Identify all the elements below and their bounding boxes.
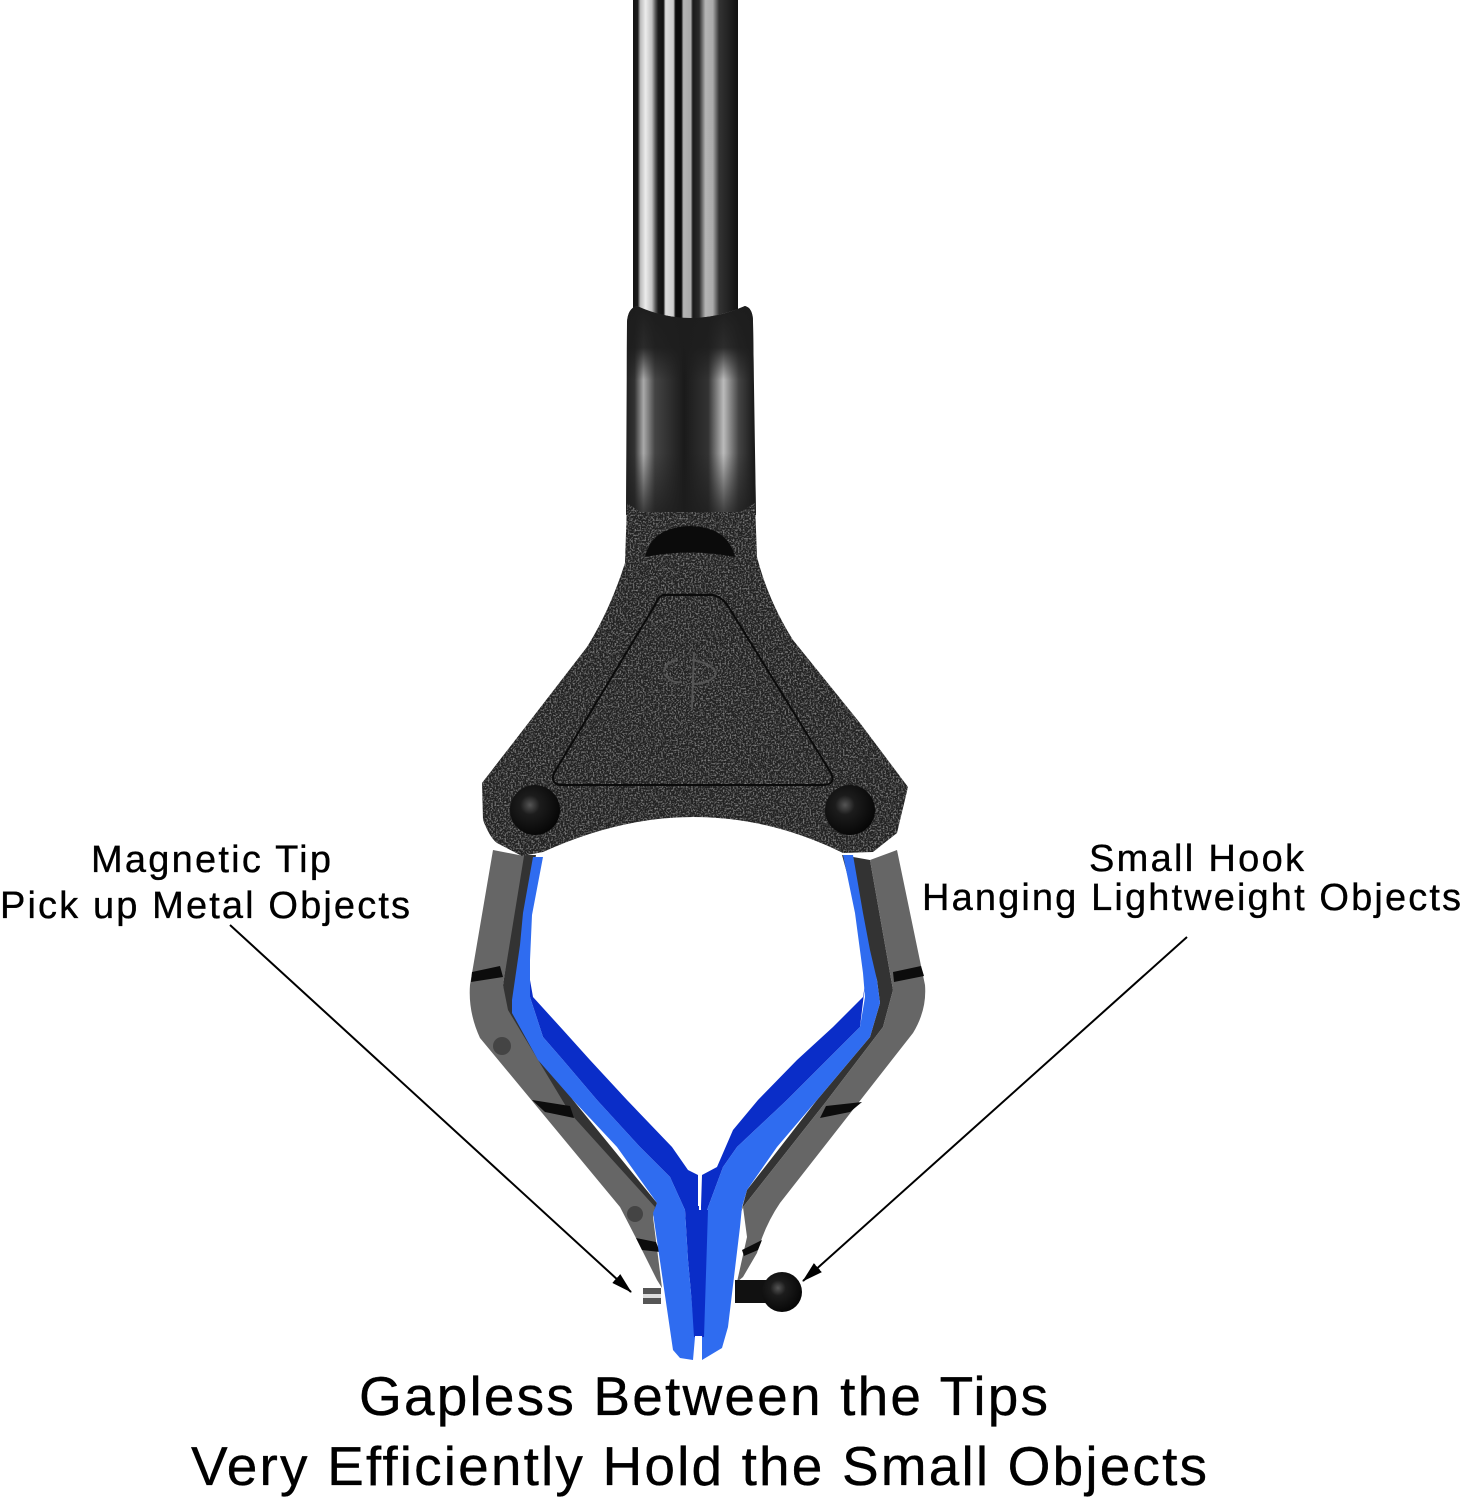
handle collar xyxy=(626,306,756,515)
black plastic handle head xyxy=(482,503,908,856)
caption: Gapless Between the Tips xyxy=(359,1365,1048,1427)
caption xyxy=(191,1365,1207,1497)
small hook xyxy=(735,1272,802,1312)
label: magnetic tip: Magnetic Tip xyxy=(91,839,331,881)
label: small hook: Hanging Lightweight Objects xyxy=(922,877,1461,919)
left gray jaw arm xyxy=(470,850,662,1288)
magnetic tip xyxy=(643,1288,661,1304)
right dark jaw liner xyxy=(741,855,893,1212)
left blue grip pad xyxy=(512,857,699,1360)
caption: Very Efficiently Hold the Small Objects xyxy=(191,1435,1207,1497)
label: small hook: Small Hook xyxy=(1089,838,1305,880)
jaw arm dark joints xyxy=(471,966,924,1256)
right rivet xyxy=(825,785,875,835)
telescopic metal shaft xyxy=(633,0,738,326)
arrow: magnetic tip xyxy=(230,925,631,1292)
triangle panel xyxy=(553,595,832,785)
arrow: small hook xyxy=(803,937,1187,1281)
left dark jaw liner xyxy=(503,855,657,1218)
label: small hook xyxy=(922,838,1461,919)
tip gap xyxy=(695,1174,702,1362)
logo emblem xyxy=(664,652,716,708)
right blue grip pad xyxy=(701,855,880,1360)
inner recess on head xyxy=(645,526,735,557)
label: magnetic tip xyxy=(0,839,410,927)
left rivet xyxy=(510,785,560,835)
center dark blue between the tips xyxy=(686,1210,708,1337)
label: magnetic tip: Pick up Metal Objects xyxy=(0,885,410,927)
right gray jaw arm xyxy=(737,850,925,1282)
